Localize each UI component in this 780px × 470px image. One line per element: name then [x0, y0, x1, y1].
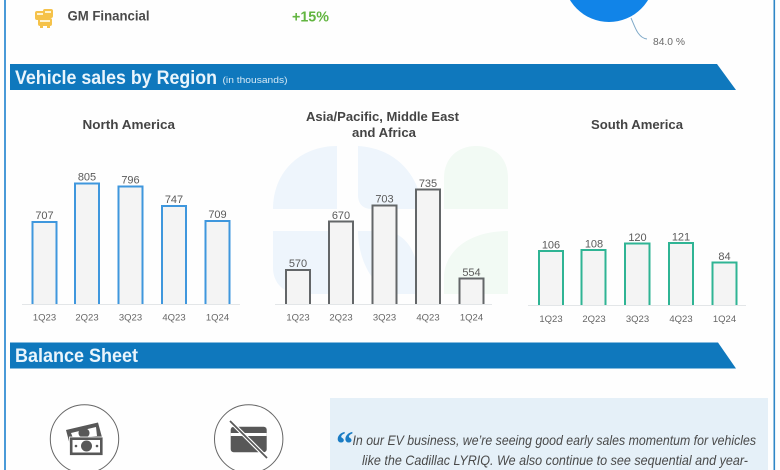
- chart: North America: 707: [35, 210, 54, 222]
- chart: South America: 1Q23: [539, 314, 563, 325]
- chart: South America: 1Q24: [713, 314, 736, 325]
- chart: South America: 84: [718, 251, 731, 263]
- heading banner: Vehicle sales by Region: Vehicle sales by Region: [15, 68, 217, 89]
- chart: Asia/Pacific, Middle East and Africa: [275, 109, 492, 324]
- chart: North America: 709: [208, 209, 227, 221]
- watermark logo: [273, 146, 508, 294]
- panel: quote: [330, 398, 768, 470]
- chart: South America: 106: [542, 240, 560, 252]
- chart: North America: 1Q23: [33, 312, 56, 324]
- pie chart fragment: 84.0 %: [653, 37, 685, 48]
- chart: South America: 108: [585, 238, 603, 250]
- icon: cars: [35, 9, 53, 28]
- chart: South America: 4Q23: [669, 314, 693, 325]
- chart: North America: 2Q23: [75, 312, 99, 324]
- value: +15%: +15%: [292, 8, 329, 26]
- chart: Asia/Pacific, Middle East and Africa: 554: [462, 267, 481, 279]
- heading banner: Balance Sheet: Balance Sheet: [15, 346, 139, 367]
- chart: Asia/Pacific, Middle East and Africa: 1Q24: [460, 312, 483, 324]
- label: GM Financial: GM Financial: [68, 8, 150, 24]
- icon: cash: [50, 405, 119, 470]
- icon: quotation mark: “: [336, 424, 354, 463]
- chart: Asia/Pacific, Middle East and Africa: 670: [332, 210, 350, 222]
- chart: North America: 3Q23: [119, 312, 142, 324]
- chart: North America: 1Q24: [206, 312, 229, 324]
- chart: South America: 121: [672, 232, 690, 244]
- chart: South America: 2Q23: [582, 314, 606, 325]
- chart: South America: 120: [628, 232, 647, 244]
- chart: South America: 3Q23: [626, 314, 649, 325]
- chart: Asia/Pacific, Middle East and Africa: 3Q23: [373, 312, 396, 324]
- chart: North America: 805: [78, 172, 96, 184]
- chart: Asia/Pacific, Middle East and Africa: 735: [419, 178, 437, 190]
- chart: Asia/Pacific, Middle East and Africa: 2Q23: [329, 312, 353, 324]
- chart: North America: 747: [165, 194, 183, 206]
- heading banner: Balance Sheet: [10, 342, 736, 368]
- row: GM Financial: [35, 8, 329, 28]
- chart: North America: [22, 117, 240, 324]
- pie chart fragment: [563, 0, 685, 48]
- chart: Asia/Pacific, Middle East and Africa: 703: [375, 194, 394, 206]
- icon: no credit card: [214, 405, 283, 470]
- panel: quote: like the Cadillac LYRIQ. We also continue to see sequential and year-: [362, 452, 748, 468]
- chart title: and Africa: [352, 125, 417, 140]
- chart title: South America: [591, 117, 684, 132]
- heading banner: Vehicle sales by Region: (in thousands): [222, 75, 288, 86]
- chart: South America: [528, 117, 746, 325]
- chart title: North America: [82, 117, 176, 132]
- chart: North America: 4Q23: [162, 312, 186, 324]
- chart: Asia/Pacific, Middle East and Africa: 4Q23: [416, 312, 440, 324]
- chart title: [306, 109, 460, 140]
- chart: Asia/Pacific, Middle East and Africa: 570: [289, 258, 307, 270]
- chart: North America: 796: [121, 174, 140, 186]
- heading banner: Vehicle sales by Region: [10, 64, 736, 90]
- chart: Asia/Pacific, Middle East and Africa: 1Q23: [286, 312, 310, 324]
- chart title: Asia/Pacific, Middle East: [306, 109, 460, 124]
